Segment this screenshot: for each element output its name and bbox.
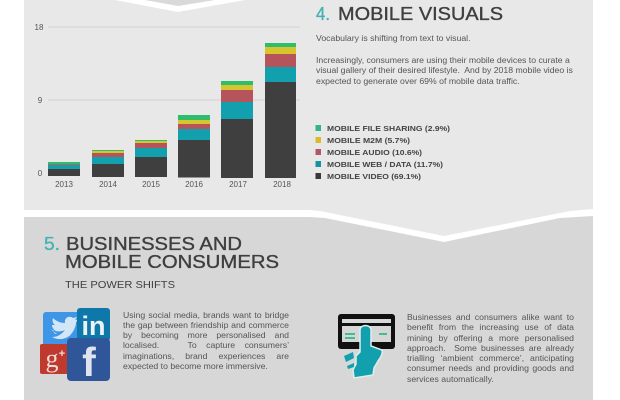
hand (353, 326, 382, 378)
legend item: file sharing: MOBILE FILE SHARING (2.9%) (327, 124, 451, 133)
legend item: video: MOBILE VIDEO (69.1%) (327, 172, 422, 181)
bar 2016 (178, 115, 210, 178)
legend item: m2m: MOBILE M2M (5.7%) (327, 136, 411, 145)
subheading: the power shifts: THE POWER SHIFTS (65, 280, 175, 291)
x axis labels: 2016 (185, 180, 203, 189)
bar 2018 (265, 43, 296, 178)
bar 2015 (135, 140, 167, 177)
x axis labels: 2015 (142, 180, 160, 189)
icon: hand swiping card (338, 314, 395, 378)
icon: google plus: g (46, 344, 58, 373)
heading: 4. mobile visuals: MOBILE VISUALS (338, 4, 503, 24)
text block: social media brands: the gap between friendship and commerce (123, 320, 289, 330)
text block: data mining: trialling ‘ambient commerce’, anticipating (407, 353, 574, 363)
legend (316, 124, 451, 181)
text block: mobile visuals body: Increasingly, consumers are using their mobile devices to curate a (316, 54, 570, 64)
text block: data mining: services automatically. (407, 374, 494, 384)
text block: social media brands: by becoming more personalised and (123, 330, 289, 340)
legend item: audio: MOBILE AUDIO (10.6%) (327, 148, 423, 157)
heading: 4. mobile visuals: 4. (316, 4, 330, 24)
y axis labels: 0 (38, 169, 43, 178)
panel: mobile visuals (24, 0, 593, 236)
icon: linkedin: in (82, 311, 106, 341)
curled fingers (344, 352, 354, 362)
bar 2014 (92, 150, 124, 177)
x axis labels: 2017 (229, 180, 247, 189)
y axis labels: 18 (35, 23, 44, 32)
text block: social media brands (123, 310, 289, 371)
x axis labels (55, 180, 291, 189)
y axis labels: 9 (38, 96, 43, 105)
text block: data mining: Businesses and consumers alike want to (407, 312, 574, 322)
bar 2017 (221, 81, 253, 178)
text block: data mining: mining by offering a more personalised (407, 333, 574, 343)
text block: mobile visuals body (316, 54, 573, 86)
bar chart: mobile data traffic (35, 23, 300, 189)
card (338, 314, 395, 349)
panel: businesses and mobile consumers (24, 216, 593, 400)
heading: 5. businesses and mobile consumers: MOBILE CONSUMERS (65, 252, 279, 272)
icon: twitter (43, 312, 81, 346)
text block: mobile visuals body: expected to generate over 69% of mobile data traffic. (316, 76, 520, 86)
text block: social media brands: Using social media, brands want to bridge (123, 310, 289, 320)
icon: social media logos (40, 308, 110, 385)
text block: data mining: approach. Some businesses are already (407, 343, 574, 353)
x axis labels: 2013 (55, 180, 73, 189)
bar 2013 (48, 162, 80, 176)
text block: social media brands: imaginations, brand experiences are (123, 351, 289, 361)
icon: google plus: + (59, 348, 65, 360)
heading: 5. businesses and mobile consumers (44, 234, 279, 272)
icon: google plus (40, 344, 69, 374)
text block: data mining: benefit from the increasing use of data (407, 322, 574, 332)
text block: mobile visuals intro: Vocabulary is shifting from text to visual. (316, 33, 471, 43)
heading: 5. businesses and mobile consumers: 5. (44, 234, 60, 254)
y axis labels (35, 23, 44, 178)
text block: data mining: consumer needs and providing goods and (407, 363, 574, 373)
icon: facebook: f (82, 339, 96, 385)
heading: 5. businesses and mobile consumers: BUSINESSES AND (66, 234, 242, 254)
x axis labels: 2014 (99, 180, 117, 189)
text block: social media brands: expected to become more immersive. (123, 361, 268, 371)
x axis labels: 2018 (273, 180, 291, 189)
text block: mobile visuals body: visual gallery of their desired lifestyle. And by 2018 mobile video is (316, 65, 573, 75)
legend item: web data: MOBILE WEB / DATA (11.7%) (327, 160, 444, 169)
text block: data mining (407, 312, 574, 384)
text block: social media brands: localised. To capture consumers’ (123, 340, 289, 350)
